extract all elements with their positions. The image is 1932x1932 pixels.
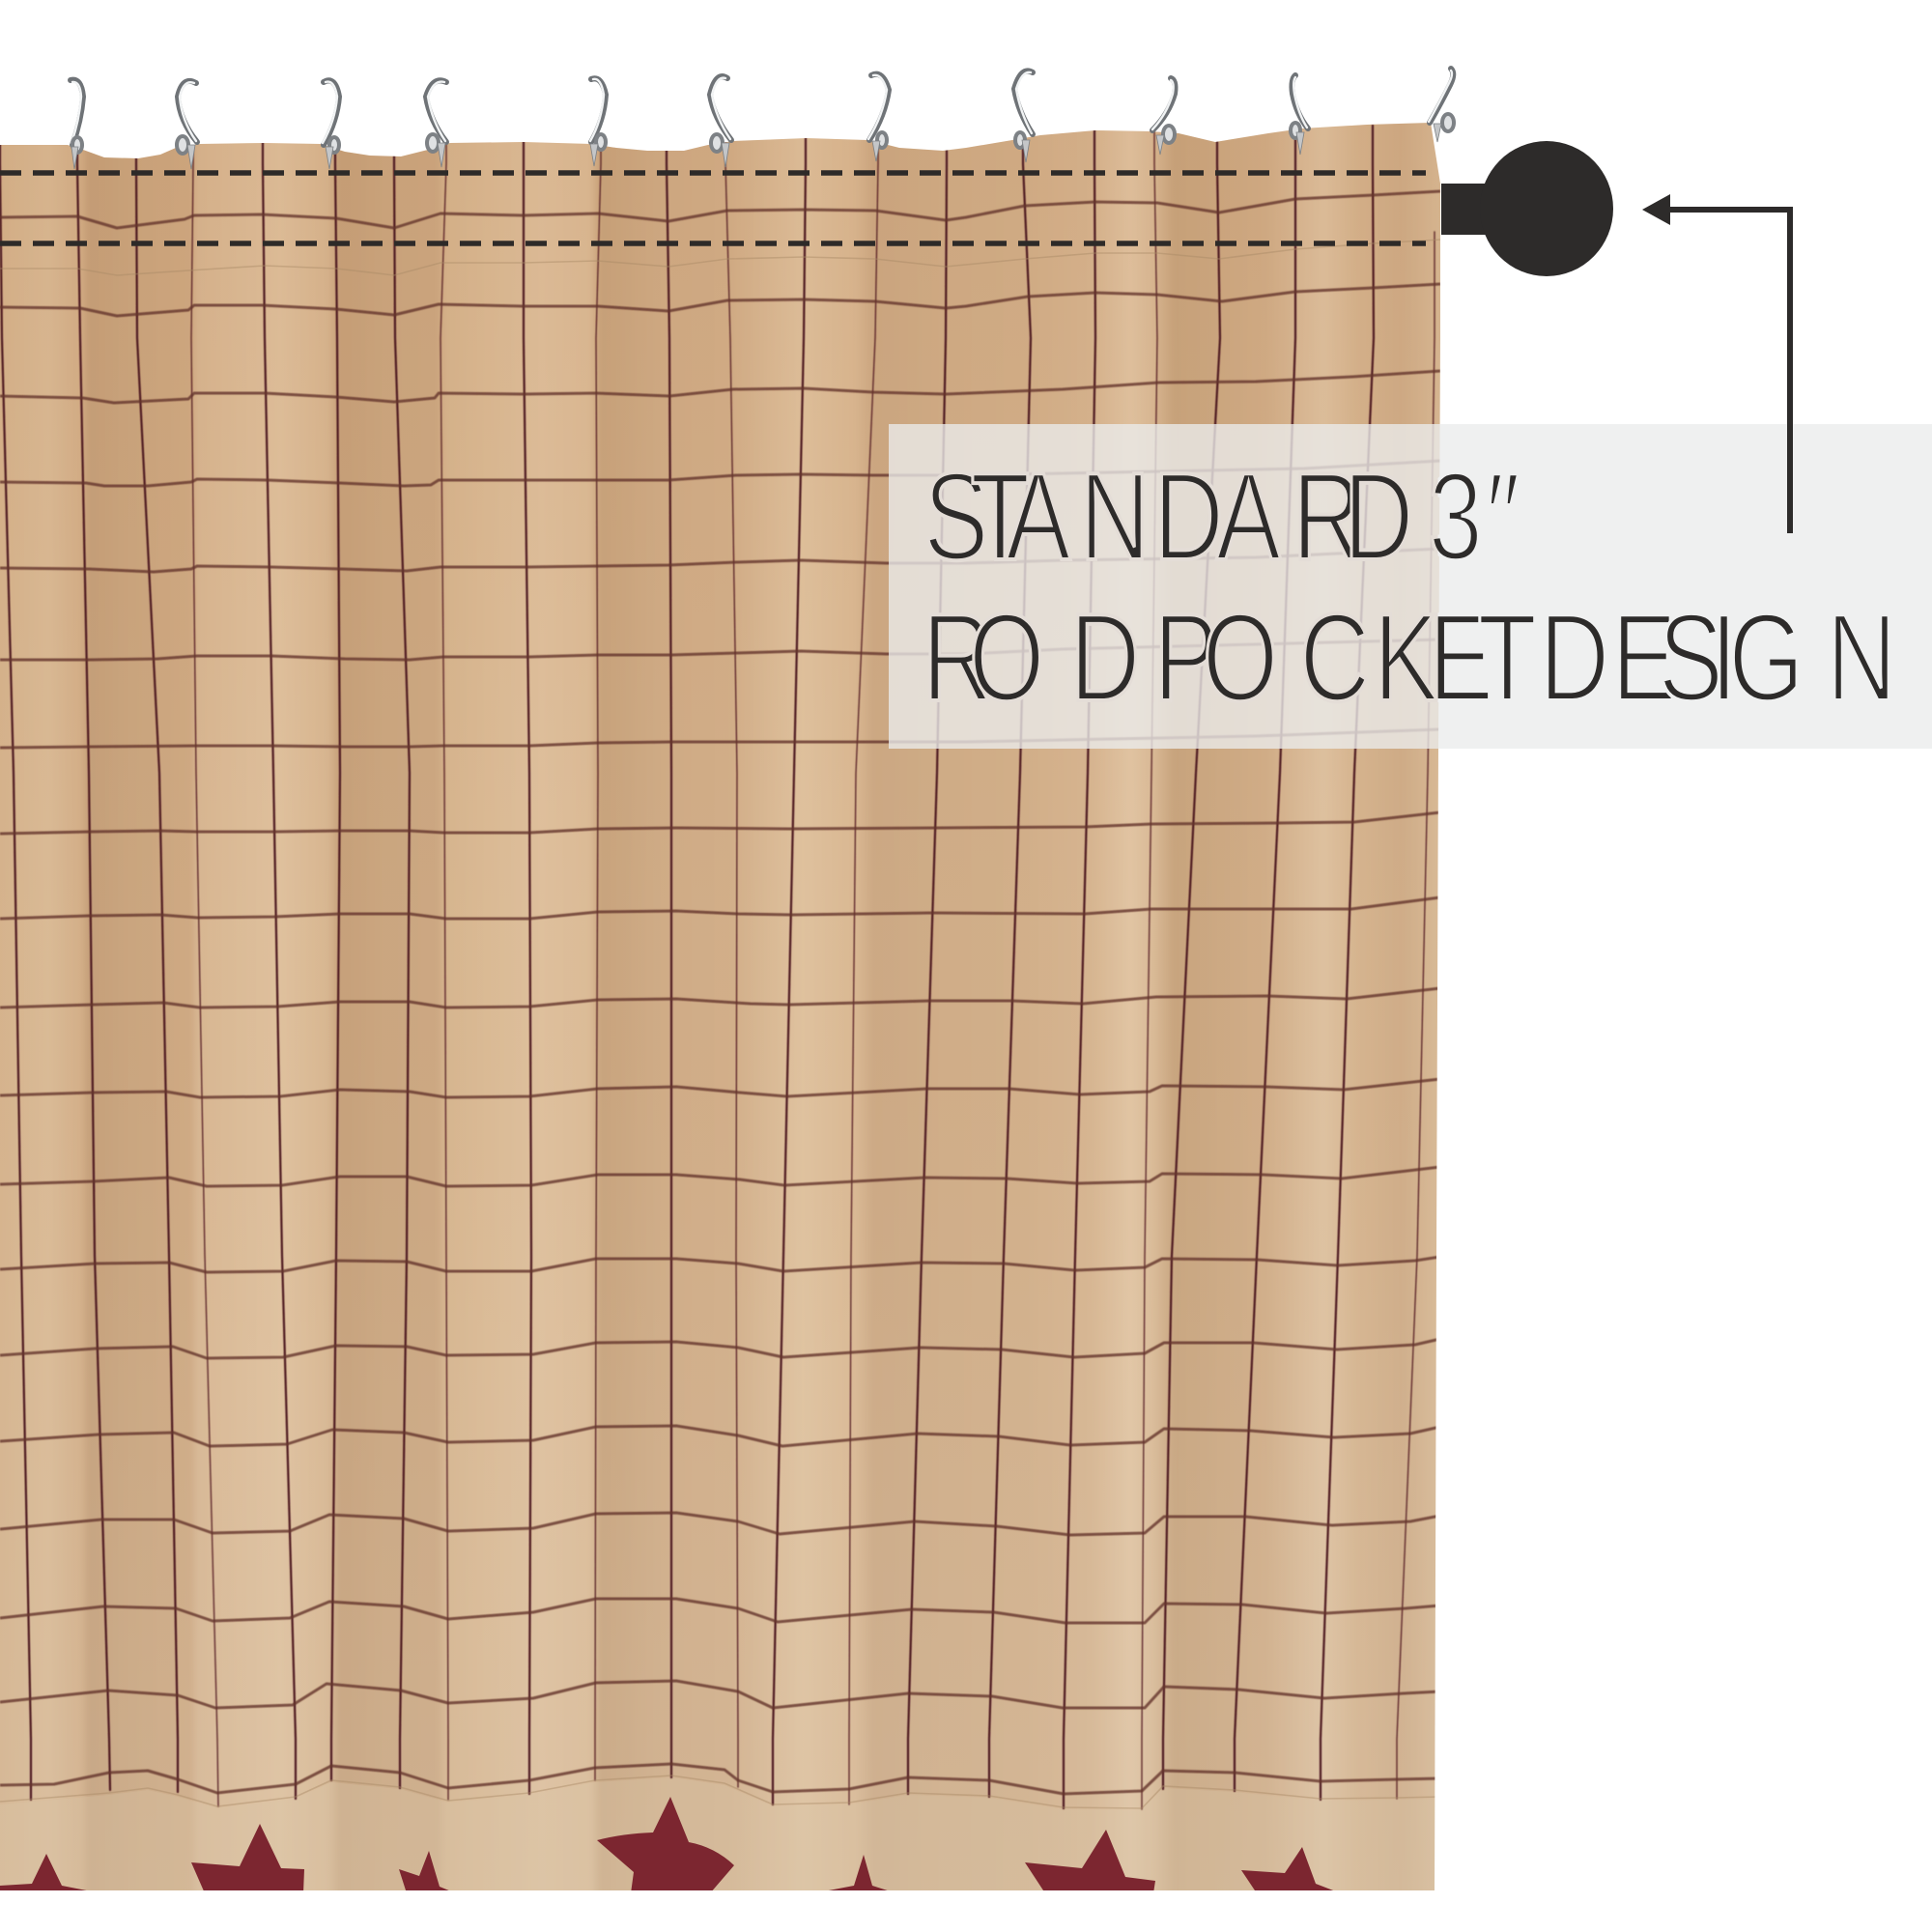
fabric tone overlay	[0, 116, 1444, 1893]
rod pocket stitch seam	[0, 240, 1440, 275]
fabric base with folds	[0, 106, 1454, 1903]
horizontal plaid lines	[0, 191, 1440, 1794]
curtain hooks	[71, 69, 1454, 169]
callout text	[923, 446, 1896, 727]
border stars	[0, 1797, 1341, 1893]
arrow pointing to rod pocket	[1642, 194, 1790, 533]
line two: ROD POCKET DESIGN	[923, 587, 1896, 727]
stitched rod pocket dashed lines	[0, 173, 1426, 243]
vertical plaid lines	[0, 126, 1435, 1809]
curtain rod and finial	[1441, 141, 1613, 276]
callout panel	[889, 424, 1932, 749]
hem stitch line	[0, 1776, 1440, 1808]
line one: STANDARD 3″	[923, 446, 1520, 586]
curtain panel	[0, 106, 1454, 1903]
bottom hem band	[86, 1781, 1188, 1890]
